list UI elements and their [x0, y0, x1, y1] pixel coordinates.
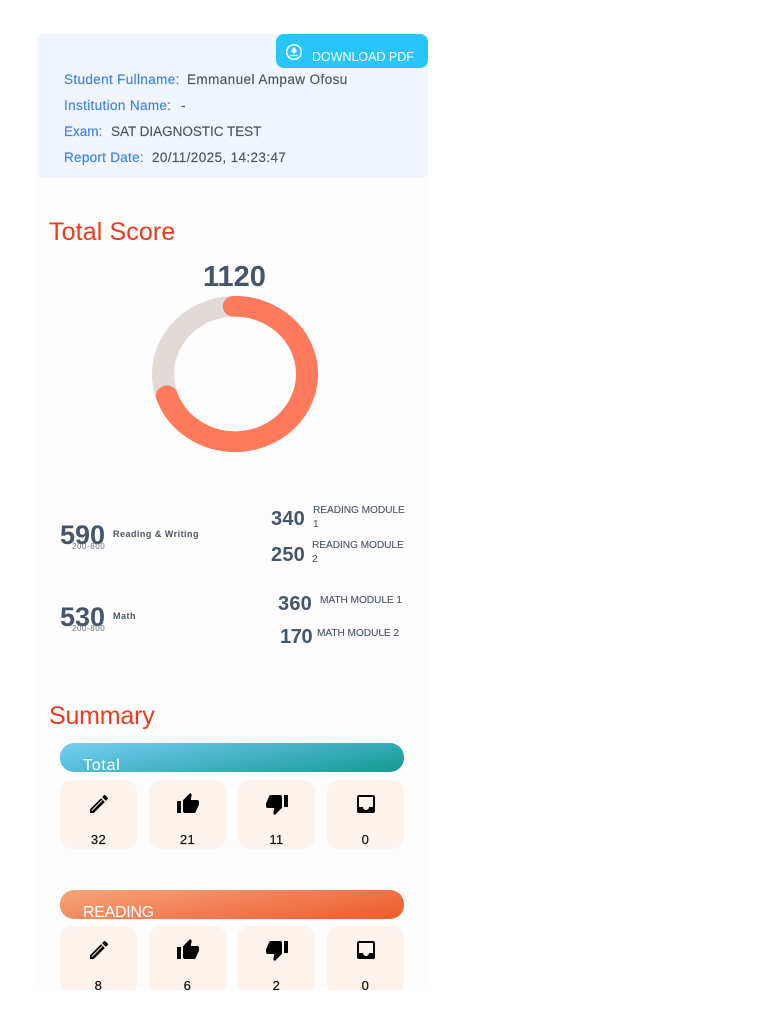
banner: reading: [60, 890, 404, 919]
value: exam: SAT DIAGNOSTIC TEST: [111, 124, 261, 139]
section name: Reading & Writing: [113, 529, 199, 539]
score: reading module 2: [271, 540, 404, 566]
stat card: total incorrect: [238, 780, 315, 849]
stat card: reading answered: [60, 926, 137, 995]
stat card: total unanswered: [327, 780, 404, 849]
score: reading module 1: [271, 505, 405, 530]
module name: 2: [312, 554, 318, 565]
module score: 360: [278, 593, 312, 615]
icon: inbox: [357, 941, 375, 959]
label: institution name: Institution Name:: [64, 98, 171, 113]
count: 11: [269, 832, 284, 847]
panel: student information: [37, 34, 428, 178]
count: 21: [180, 832, 195, 847]
score number: 530: [60, 602, 105, 632]
total score value: 1120: [203, 261, 266, 293]
score range: 200-800: [72, 542, 105, 550]
stat card: total answered: [60, 780, 137, 849]
label: exam: Exam:: [64, 124, 102, 139]
label: student fullname: Student Fullname:: [64, 72, 180, 87]
icon: thumbs down: [266, 795, 288, 815]
section name: Math: [113, 611, 136, 621]
stat card: reading unanswered: [327, 926, 404, 995]
label: report date: Report Date:: [64, 150, 144, 165]
button: download pdf: [276, 34, 428, 68]
count: 32: [91, 832, 106, 847]
value: institution name: -: [181, 98, 186, 113]
icon: inbox: [357, 795, 375, 813]
module name: MATH MODULE 1: [320, 595, 402, 606]
module name: MATH MODULE 2: [317, 628, 399, 639]
count: 0: [362, 832, 369, 847]
score range: 200-800: [72, 624, 105, 632]
score: math module 1: [278, 593, 402, 615]
score number: 590: [60, 520, 105, 550]
value: student fullname: Emmanuel Ampaw Ofosu: [187, 72, 348, 87]
page panel background: [37, 178, 428, 990]
value: report date: 20/11/2025, 14:23:47: [152, 150, 286, 165]
module score: 250: [271, 544, 305, 566]
clipped reading stat row: [60, 926, 404, 990]
icon: pencil: [90, 795, 108, 813]
score: reading and writing: [60, 520, 199, 550]
chart: total score donut: [152, 296, 318, 452]
module score: 340: [271, 508, 305, 530]
icon: pencil: [90, 941, 108, 959]
banner: total: [60, 743, 404, 772]
heading: total score: Total Score: [49, 218, 175, 246]
score: math module 2: [280, 626, 399, 648]
score: math: [60, 602, 136, 632]
module name: 1: [313, 519, 319, 530]
button label: DOWNLOAD PDF: [312, 50, 414, 64]
icon: thumbs up: [177, 939, 199, 959]
module name: READING MODULE: [313, 505, 405, 516]
module score: 170: [280, 626, 312, 648]
icon: download: [286, 44, 302, 60]
module name: READING MODULE: [312, 540, 404, 551]
module name: [312, 540, 404, 565]
heading: summary: Summary: [49, 702, 155, 730]
stat card: reading correct: [149, 926, 226, 995]
icon: thumbs up: [177, 793, 199, 813]
module name: [313, 505, 405, 530]
stat card: reading incorrect: [238, 926, 315, 995]
icon: thumbs down: [266, 941, 288, 961]
stat card: total correct: [149, 780, 226, 849]
